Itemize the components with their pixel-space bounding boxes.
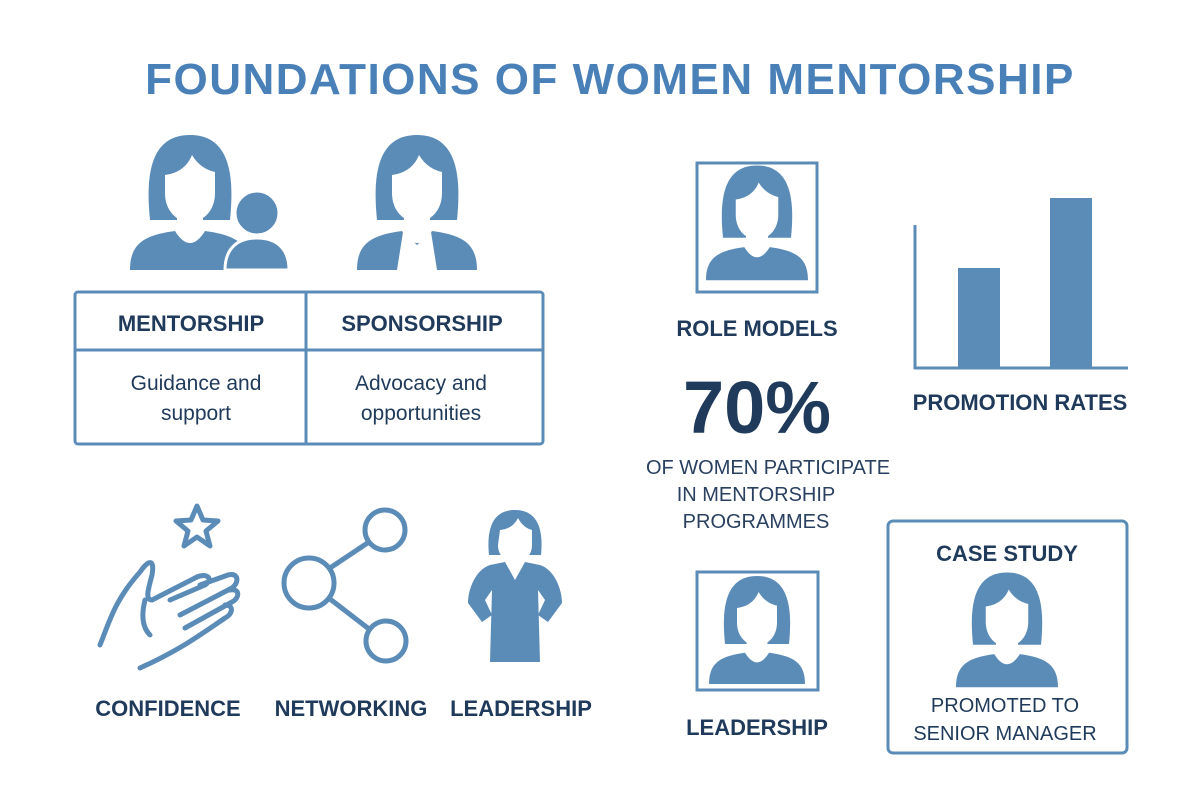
bar chart: promotion rates [913, 198, 1128, 415]
title: FOUNDATIONS OF WOMEN MENTORSHIP [145, 55, 1075, 104]
labels: bottom-left icons: LEADERSHIP [450, 696, 592, 721]
stat: 70%: PROGRAMMES [683, 511, 829, 533]
bar chart: promotion rates: PROMOTION RATES [913, 390, 1127, 415]
text: mentorship desc: support [161, 402, 231, 425]
panel: role models [676, 163, 838, 341]
icon: leadership woman [468, 510, 562, 662]
labels: bottom-left icons: NETWORKING [275, 696, 427, 721]
panel: leadership frame: LEADERSHIP [686, 715, 828, 740]
icon: confidence hand with star [100, 506, 238, 668]
heading: mentorship: MENTORSHIP [118, 311, 264, 336]
panel: leadership frame [686, 572, 828, 740]
panel: case study: CASE STUDY [936, 541, 1078, 566]
table: mentorship vs sponsorship [75, 292, 543, 444]
icon: mentor with mentee [130, 135, 289, 270]
heading: sponsorship: SPONSORSHIP [341, 311, 503, 336]
stat: 70%: OF WOMEN PARTICIPATE [646, 457, 890, 479]
stat: 70% [646, 366, 890, 533]
icon: sponsor woman [357, 135, 477, 270]
text: sponsorship desc: Advocacy and [355, 372, 487, 395]
icon: networking [284, 510, 406, 661]
text: mentorship desc: Guidance and [131, 372, 261, 395]
labels: bottom-left icons [95, 696, 592, 721]
stat: 70%: 70% [683, 366, 831, 449]
labels: bottom-left icons: CONFIDENCE [95, 696, 241, 721]
panel: case study [888, 521, 1127, 753]
stat: 70%: IN MENTORSHIP [677, 484, 835, 506]
panel: role models: ROLE MODELS [676, 316, 838, 341]
panel: case study: PROMOTED TO [931, 695, 1079, 717]
text: sponsorship desc: opportunities [361, 402, 481, 425]
panel: case study: SENIOR MANAGER [913, 723, 1097, 745]
